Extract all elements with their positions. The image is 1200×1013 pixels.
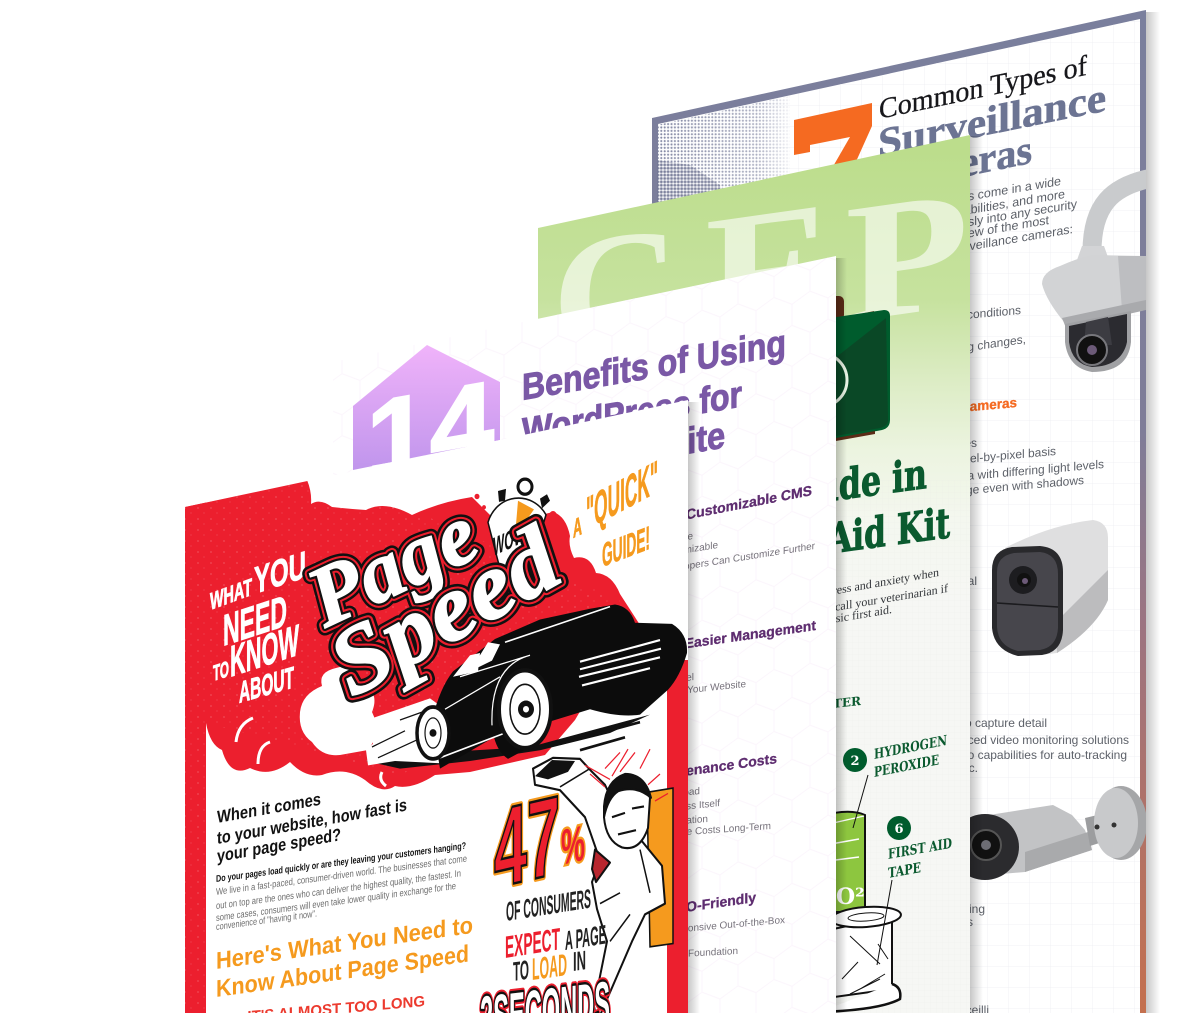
second section notes: image even with shadows xyxy=(947,473,1084,499)
side heading: what you need to know about: YOU xyxy=(254,544,306,603)
kit intro text: always call your veterinarian if xyxy=(799,581,949,620)
badge 2: 2 xyxy=(850,754,860,769)
car front smoke body xyxy=(366,698,445,765)
smoke clouds xyxy=(300,667,376,755)
car shadow xyxy=(366,715,650,769)
benefit: management xyxy=(631,617,816,701)
third section notes: etc. xyxy=(959,761,978,775)
benefit: management: Control of Your Website xyxy=(641,679,746,701)
benefit: customizable: Highly Customizable CMS xyxy=(639,482,812,532)
heading line one: Common Types of xyxy=(879,50,1087,126)
panel: page speed page xyxy=(185,395,688,1013)
rear shadow streaks xyxy=(560,722,640,750)
kit intro text: Avoid stress and anxiety when xyxy=(793,565,939,605)
label: hydrogen peroxide xyxy=(874,734,947,777)
side heading: what you need to know about: KNOW xyxy=(230,615,299,687)
kit title line two: First Aid Kit xyxy=(735,497,950,576)
stat 47 percent: 47 xyxy=(494,772,560,913)
hexagon pattern xyxy=(333,250,836,1013)
page shadow: first aid xyxy=(970,136,983,1013)
icon: wireless camera xyxy=(992,520,1108,656)
third section notes xyxy=(970,718,1129,1013)
orange subheading: Here's What You Need to xyxy=(216,912,473,975)
benefit: customizable xyxy=(627,482,816,577)
orange subheading xyxy=(216,912,473,1003)
page shadow: wordpress xyxy=(836,258,847,1013)
second section notes: al xyxy=(968,574,977,588)
splash specks xyxy=(185,480,620,1013)
benefit: seo: SEO-Friendly xyxy=(667,889,756,917)
halftone dark patch xyxy=(658,160,720,202)
stat 47 percent: % xyxy=(561,814,585,876)
intro paragraph xyxy=(216,841,467,933)
label: first aid tape xyxy=(888,838,952,878)
label: water: WATER xyxy=(811,694,862,713)
stat caption: LOAD xyxy=(532,947,567,987)
red side band left xyxy=(185,500,206,1013)
question heading: to your website, how fast is xyxy=(217,795,407,848)
intro paragraph: some cases, consumers will even take lower quality in exchange for the xyxy=(216,881,456,924)
benefit: seo: Responsive Out-of-the-Box xyxy=(665,915,785,937)
third section notes: advanced video monitoring solutions xyxy=(935,733,1129,747)
page speed title xyxy=(292,486,578,716)
panel: page speed page: GUIDE! xyxy=(602,520,650,575)
side heading: what you need to know about: ABOUT xyxy=(239,661,294,710)
stat 47 percent xyxy=(494,772,585,913)
smoke swirls xyxy=(236,718,386,786)
script word page: Page xyxy=(292,486,492,646)
label: first aid tape: FIRST AID xyxy=(888,836,952,863)
watermark letters: C xyxy=(552,189,680,395)
intro paragraph: Do your pages load quickly or are they leaving your customers hanging? xyxy=(216,841,466,885)
watermark letters: P xyxy=(845,153,969,359)
heading line three: Your Website xyxy=(522,414,725,490)
quick guide callout xyxy=(573,451,658,575)
script word page: Page xyxy=(292,486,492,646)
number 14: 14 xyxy=(366,358,494,503)
stat 47 percent: 47 xyxy=(494,772,560,913)
intro paragraph: out on top are the ones who can deliver the highest quality, the fastest. In xyxy=(216,868,461,912)
watermark letters xyxy=(560,200,964,316)
page background xyxy=(185,395,688,1013)
stat caption: EXPECT xyxy=(505,921,560,965)
question heading: your page speed? xyxy=(217,824,341,866)
script word page: Page xyxy=(292,486,492,646)
second section notes: a with differing light levels xyxy=(968,457,1104,483)
benefit: customizable: Highly Customizable xyxy=(627,540,718,565)
benefit: maintenance xyxy=(605,750,777,840)
watermark letters: F xyxy=(705,166,825,371)
label: hydrogen peroxide: HYDROGEN xyxy=(874,733,947,763)
intro paragraph xyxy=(970,177,1077,250)
panel: page speed page: "QUICK" xyxy=(586,451,658,540)
heading line three: Cameras xyxy=(878,126,1032,203)
benefit: seo xyxy=(664,889,785,961)
label: first aid tape: TAPE xyxy=(888,860,921,882)
label: hydrogen peroxide: PEROXIDE xyxy=(874,752,939,781)
car details xyxy=(440,607,661,758)
icon: dome camera xyxy=(1042,178,1152,372)
script word speed: Speed xyxy=(312,506,578,716)
page shadow: surveillance xyxy=(1146,12,1160,1013)
intro paragraph: Surveillance cameras come in a wide xyxy=(855,174,1061,222)
orange subheading: Know About Page Speed xyxy=(216,941,469,1003)
intro paragraph: range of capabilities, and more xyxy=(894,187,1065,230)
benefit: maintenance: WordPress Itself xyxy=(647,798,720,817)
page inner background xyxy=(658,19,1140,1013)
panel: page speed page: OF CONSUMERS xyxy=(506,883,591,927)
icon: peroxide bottle: O² xyxy=(836,884,865,910)
red side band right xyxy=(667,660,688,1013)
page background xyxy=(538,130,970,1013)
benefit: seo: SEO Foundation xyxy=(664,946,738,961)
kit title line one: Guide in xyxy=(777,448,927,518)
kit intro text: your basic first aid. xyxy=(799,602,892,631)
subheading cameras: HDR Cameras xyxy=(927,395,1017,418)
panel: first aid kit page xyxy=(538,130,970,1013)
intro paragraph: common surveillance cameras: xyxy=(901,222,1073,265)
halftone texture xyxy=(658,96,790,202)
benefit: maintenance: Reduce Costs Long-Term xyxy=(658,821,771,840)
first camera notes xyxy=(970,307,1025,354)
panel: page speed page: WOW! xyxy=(493,516,529,562)
second section notes xyxy=(970,440,1104,585)
badge 6: 6 xyxy=(894,822,904,837)
panel: wordpress benefits page xyxy=(333,250,836,1013)
second section notes: es xyxy=(964,436,977,450)
benefit: customizable: Developers Can Customize Further xyxy=(659,541,816,577)
angry man illustration xyxy=(533,749,673,1013)
background grid xyxy=(658,19,1140,1013)
orange panel xyxy=(647,788,673,947)
benefit: maintenance: Automation xyxy=(657,814,708,829)
benefit: management: Easier Management xyxy=(685,617,816,651)
intro paragraph: We live in a fast-paced, consumer-driven world. The businesses that come xyxy=(216,854,467,898)
stat seconds xyxy=(480,969,610,1013)
intro paragraph: blend seamlessly into any security xyxy=(887,197,1078,243)
first camera notes: all weather conditions xyxy=(906,303,1021,327)
side heading: what you need to know about: TO xyxy=(213,656,229,686)
icon: stopwatch xyxy=(474,479,556,569)
red splash background xyxy=(185,480,640,789)
benefit: maintenance: Easy Upload xyxy=(643,786,700,803)
car front grille lines xyxy=(372,709,430,758)
car front wheel xyxy=(417,707,449,759)
benefit: management: Intuitive Panel xyxy=(631,672,694,690)
script word page: Page xyxy=(292,486,492,646)
first camera notes: lighting changes, xyxy=(936,332,1026,359)
leader lines xyxy=(853,775,892,965)
badge 6 xyxy=(887,816,911,840)
impact lines xyxy=(585,749,668,801)
page frame xyxy=(652,10,1146,1013)
heading line two: Surveillance xyxy=(878,74,1106,166)
third section notes: pro capabilities for auto-tracking xyxy=(957,748,1127,762)
car body xyxy=(432,604,687,769)
question heading: When it comes xyxy=(217,789,321,827)
quick guide callout: A xyxy=(573,510,582,544)
man figure xyxy=(533,758,665,1013)
panel: surveillance cameras page xyxy=(652,10,1152,1013)
script word speed: Speed xyxy=(312,506,578,716)
side heading: what you need to know about: NEED xyxy=(223,585,287,656)
icon: tape roll xyxy=(836,906,902,1013)
icon: first aid kit xyxy=(836,296,890,441)
stat caption xyxy=(505,883,606,987)
third section notes: to capture detail xyxy=(962,716,1047,730)
stat caption: IN xyxy=(573,944,586,977)
heading line one: Benefits of Using xyxy=(522,321,786,408)
intro paragraph: convenience of "having it now". xyxy=(216,909,317,933)
big orange seven xyxy=(794,103,872,164)
benefit: customizable: Open Source xyxy=(634,531,693,551)
icon: peroxide bottle xyxy=(836,810,866,913)
badge 2 xyxy=(843,748,867,772)
script word speed: Speed xyxy=(312,506,578,716)
icon: bullet camera xyxy=(970,786,1146,880)
page shadow: page speed xyxy=(688,402,700,1013)
car windows xyxy=(453,642,500,677)
heading line two: WordPress for xyxy=(522,373,742,452)
intro paragraph: Here are a few of the most xyxy=(902,213,1049,252)
icon: house badge xyxy=(353,345,500,470)
panel: page speed page: A PAGE xyxy=(565,919,606,956)
script word speed: Speed xyxy=(312,506,578,716)
third section notes: ing xyxy=(969,902,985,916)
second section notes: pixel-by-pixel basis xyxy=(955,444,1056,467)
third section notes: s xyxy=(967,915,973,929)
car rear wheel xyxy=(499,670,551,748)
question heading xyxy=(217,789,407,866)
stat caption: TO xyxy=(513,954,529,987)
side heading: what you need to know about xyxy=(210,544,306,710)
stat 47 percent: % xyxy=(561,814,585,876)
page background xyxy=(538,256,836,1013)
kit intro text xyxy=(836,570,948,622)
hot rod car xyxy=(366,604,687,769)
side heading: what you need to know about: WHAT xyxy=(210,574,252,616)
mesh texture xyxy=(836,480,970,1013)
benefit: maintenance: Lower Maintenance Costs xyxy=(605,750,777,790)
